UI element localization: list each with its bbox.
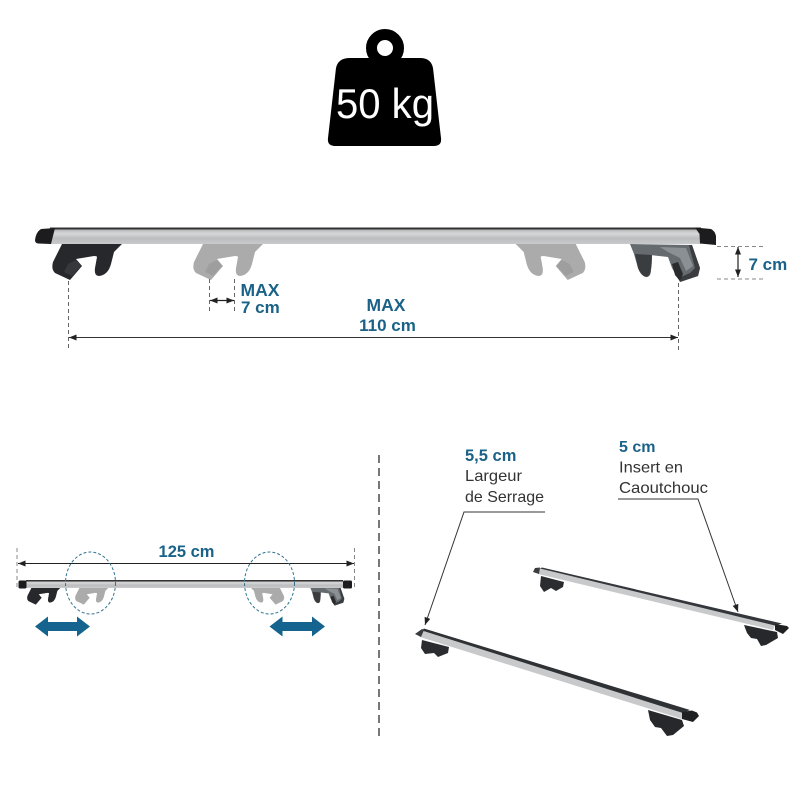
rear bar xyxy=(533,568,789,646)
callout: 5,5 cm clamping width: Largeur xyxy=(465,468,523,485)
black foot: left xyxy=(27,587,61,605)
bar with end caps xyxy=(18,580,352,588)
callout: 5 cm rubber insert: Insert en xyxy=(619,460,683,476)
chrome foot: right xyxy=(630,244,700,282)
highlight ellipse: right xyxy=(244,552,294,614)
front bar xyxy=(415,628,699,736)
highlight ellipse: left xyxy=(66,552,116,614)
dimension: 125 cm: 125 cm xyxy=(159,543,214,561)
silver bar xyxy=(50,228,701,244)
dimension: max 110 cm xyxy=(68,281,678,350)
callout: 5,5 cm clamping width: 5,5 cm xyxy=(465,447,516,465)
double arrow: right xyxy=(270,616,325,636)
dimension: max 7 cm clamp: MAX xyxy=(240,280,280,300)
grey foot: left xyxy=(75,587,109,605)
end cap: left xyxy=(35,228,55,244)
diagram: adjustable feet, 125 cm bar xyxy=(17,543,354,636)
icon: 50 kg weight xyxy=(328,34,441,146)
black foot: left xyxy=(52,244,122,280)
dimension: height 7 cm: 7 cm xyxy=(748,255,787,274)
dimension: height 7 cm xyxy=(717,246,787,279)
dimension: max 7 cm clamp: 7 cm xyxy=(241,298,280,317)
grey foot: inner right position xyxy=(516,244,585,280)
dimension: max 7 cm clamp xyxy=(210,279,280,317)
callout: 5 cm rubber insert xyxy=(618,439,738,612)
diagram: pair of bars in perspective xyxy=(415,439,789,736)
callout: 5,5 cm clamping width: de Serrage xyxy=(465,489,544,506)
grey foot: right xyxy=(250,587,284,605)
callout: 5 cm rubber insert: 5 cm xyxy=(619,439,655,456)
callout: 5,5 cm clamping width xyxy=(425,447,545,625)
divider xyxy=(378,455,380,738)
dimension: max 110 cm: MAX xyxy=(367,295,406,315)
double arrow: left xyxy=(35,616,90,636)
chrome foot: right xyxy=(310,587,344,606)
grey foot: inner left position xyxy=(193,244,263,280)
callout: 5 cm rubber insert: Caoutchouc xyxy=(619,480,708,497)
weight label: 50 kg xyxy=(336,80,434,127)
diagram: top roof bar with dimensions xyxy=(35,228,787,350)
end cap: right xyxy=(695,228,716,245)
dimension: max 110 cm: 110 cm xyxy=(359,316,416,335)
